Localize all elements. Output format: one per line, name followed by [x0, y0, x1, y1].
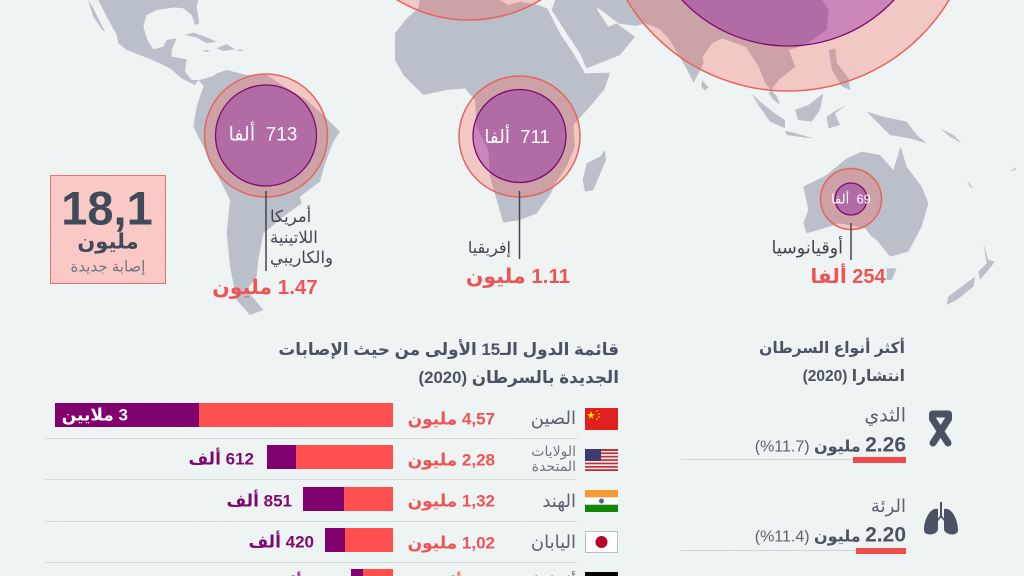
- lung name: الرئة: [871, 496, 906, 516]
- China cases value: 4,57 مليون: [408, 410, 495, 428]
- flag: Germany: [585, 572, 618, 576]
- Japan cases value: 1,02 مليون: [408, 534, 495, 552]
- breast red bar: [853, 457, 906, 463]
- heading: common cancers: انتشارا (2020): [803, 368, 905, 385]
- Germany deaths bar: [351, 569, 363, 576]
- row: Japan: [248, 528, 576, 553]
- land masses: [88, 0, 1017, 315]
- India deaths value: 851 ألف: [226, 492, 292, 510]
- Latin America total: 1.47 مليون: [212, 276, 318, 299]
- lung bar line: [681, 550, 856, 551]
- circle: Europe: [331, 0, 607, 20]
- row: Germany: [269, 569, 576, 576]
- Oceania total: 254 ألفا: [810, 266, 886, 288]
- Latin America label: أمريكا: [270, 208, 311, 226]
- Japan deaths bar: [325, 528, 345, 552]
- row: China: [55, 403, 576, 429]
- cancer: lung: [681, 496, 958, 554]
- Latin America inner value: 713 ألفا: [229, 124, 297, 146]
- total unit: مليون: [77, 230, 139, 254]
- USA name: [531, 443, 576, 474]
- flag: USA: [585, 449, 618, 471]
- India deaths bar: [303, 487, 344, 511]
- circle: Latin America: [204, 74, 328, 197]
- circle: Africa: [459, 76, 580, 197]
- heading: common cancers: [759, 338, 905, 385]
- Oceania inner value: 69 ألفا: [831, 192, 871, 206]
- row: India: [226, 487, 576, 512]
- Latin America label: [270, 206, 333, 267]
- Africa inner value: 711 ألفا: [484, 126, 550, 147]
- flag: Japan: [585, 531, 618, 553]
- Africa total: 1.11 مليون: [466, 265, 570, 288]
- heading: top 15 countries: قائمة الدول الـ15 الأولى من حيث الإصابات: [278, 340, 619, 359]
- lung value: 2.20 مليون (11.4%): [755, 524, 906, 546]
- Japan bar: [325, 528, 393, 552]
- India bar: [303, 487, 393, 511]
- Latin America label: والكاريبي: [270, 249, 333, 267]
- breast bar line: [681, 459, 853, 460]
- India cases value: 1,32 مليون: [408, 492, 495, 510]
- flag: China: [585, 408, 618, 430]
- heading: top 15 countries: [278, 339, 619, 388]
- Japan name: اليابان: [531, 532, 576, 552]
- breast value: 2.26 مليون (11.7%): [755, 434, 906, 456]
- USA name: الولايات: [531, 443, 576, 459]
- circle: Oceania: [820, 168, 882, 230]
- Latin America label: اللاتينية: [270, 228, 318, 246]
- heading: top 15 countries: الجديدة بالسرطان (2020): [419, 368, 619, 387]
- row: USA: [188, 443, 576, 474]
- Germany bar: [351, 569, 393, 576]
- total number: 18,1: [61, 182, 153, 234]
- total caption: إصابة جديدة: [71, 258, 145, 276]
- China deaths bar: [55, 403, 199, 427]
- Oceania label: أوقيانوسيا: [772, 237, 843, 257]
- USA bar: [267, 445, 393, 469]
- breast name: الثدي: [864, 406, 906, 426]
- heading: common cancers: أكثر أنواع السرطان: [759, 340, 905, 357]
- USA name: المتحدة: [532, 458, 576, 474]
- USA deaths bar: [267, 445, 296, 469]
- circle: Asia: [600, 0, 976, 91]
- Africa label: إفريقيا: [468, 240, 511, 257]
- row dividers: [45, 438, 577, 439]
- total callout box: [50, 175, 166, 284]
- Japan deaths value: 420 ألف: [248, 532, 314, 552]
- USA deaths value: 612 ألف: [188, 450, 254, 468]
- China deaths value: 3 ملايين: [62, 406, 128, 424]
- lung red bar: [856, 548, 906, 554]
- China bar: [55, 403, 393, 427]
- flag: India: [585, 490, 618, 512]
- icon: lungs: [924, 502, 958, 534]
- icon: ribbon: [929, 410, 952, 446]
- India name: الهند: [542, 491, 576, 511]
- USA cases value: 2,28 مليون: [408, 450, 495, 470]
- China name: الصين: [531, 408, 576, 428]
- leader lines: [266, 191, 851, 271]
- cancer: breast: [681, 406, 952, 463]
